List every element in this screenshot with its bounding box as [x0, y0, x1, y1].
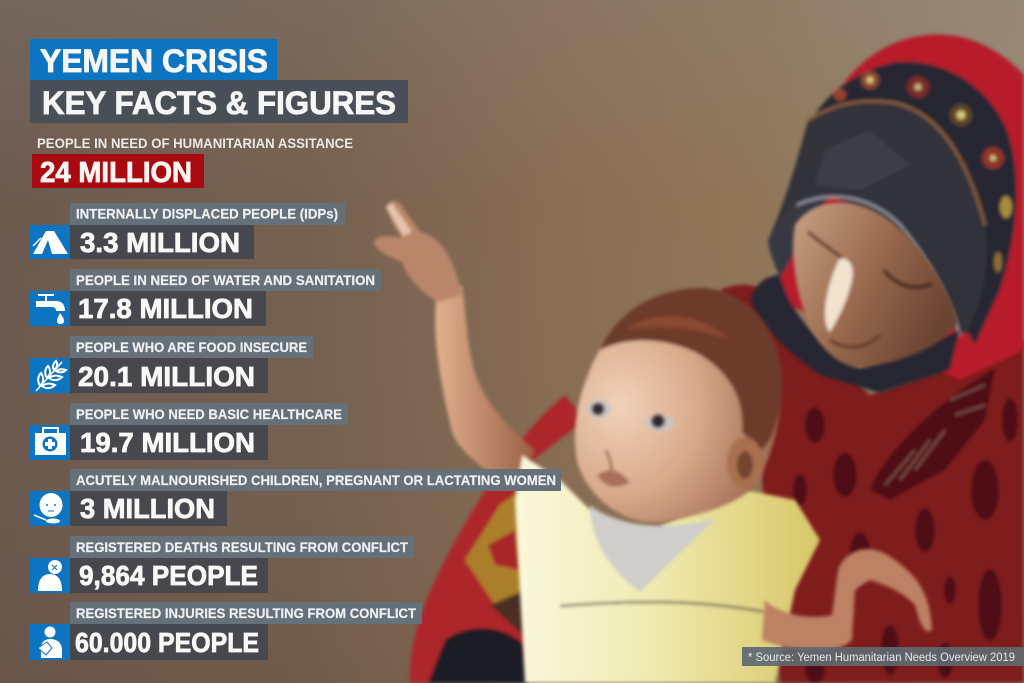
- stat row: registered injuries: [30, 602, 422, 660]
- stat row: basic healthcare: PEOPLE WHO NEED BASIC HEALTHCARE: [76, 406, 342, 422]
- stat row: registered deaths: 9,864 PEOPLE: [79, 560, 258, 591]
- stat row: internally displaced people: [30, 203, 345, 259]
- title: Yemen Crisis: YEMEN CRISIS: [40, 43, 268, 79]
- stat row: water and sanitation: PEOPLE IN NEED OF WATER AND SANITATION: [76, 272, 375, 288]
- stat row: registered deaths: [30, 536, 414, 593]
- icon: injured person head: [30, 558, 70, 593]
- heading: people in need of humanitarian assistance: PEOPLE IN NEED OF HUMANITARIAN ASSITANCE: [37, 135, 353, 151]
- source note: [742, 647, 1024, 666]
- child: raised arm and hand: [374, 201, 535, 490]
- stat row: water and sanitation: 17.8 MILLION: [78, 293, 253, 324]
- title: Key Facts and Figures: KEY FACTS & FIGURES: [42, 85, 396, 121]
- icon: wheat: [30, 358, 70, 393]
- icon: person with arm sling: [30, 624, 70, 660]
- source note: * Source: Yemen Humanitarian Needs Overview 2019: [748, 652, 1015, 664]
- stat row: acutely malnourished: [30, 469, 561, 526]
- icon: child face with spoon: [30, 491, 70, 526]
- stat row: internally displaced people: 3.3 MILLION: [80, 227, 240, 258]
- stat row: basic healthcare: 19.7 MILLION: [80, 427, 255, 458]
- stat row: registered injuries: 60.000 PEOPLE: [75, 627, 259, 658]
- icon: water tap: [30, 291, 70, 326]
- stat row: acutely malnourished: 3 MILLION: [80, 493, 215, 524]
- icon: first aid kit: [30, 425, 70, 460]
- stat row: acutely malnourished: ACUTELY MALNOURISHED CHILDREN, PREGNANT OR LACTATING WOMEN: [76, 472, 556, 488]
- child: head and hair: [575, 288, 782, 522]
- child: shirt: [515, 455, 820, 683]
- stat row: registered deaths: REGISTERED DEATHS RESULTING FROM CONFLICT: [76, 539, 408, 555]
- icon: tent: [30, 225, 70, 259]
- headline figure: 24 million: 24 MILLION: [40, 157, 192, 189]
- woman: headscarf: [750, 35, 1024, 393]
- stat row: registered injuries: REGISTERED INJURIES RESULTING FROM CONFLICT: [76, 605, 416, 621]
- stat row: food insecure: PEOPLE WHO ARE FOOD INSECURE: [76, 339, 307, 355]
- stat row: food insecure: 20.1 MILLION: [78, 361, 255, 392]
- woman: face: [793, 202, 958, 368]
- stat row: water and sanitation: [30, 269, 381, 326]
- woman: red dress: [410, 285, 1024, 683]
- stat row: internally displaced people: INTERNALLY DISPLACED PEOPLE (IDPs): [76, 206, 338, 222]
- child: lower arm and hand: [762, 549, 932, 652]
- stat row: food insecure: [30, 336, 313, 393]
- stat row: basic healthcare: [30, 403, 348, 460]
